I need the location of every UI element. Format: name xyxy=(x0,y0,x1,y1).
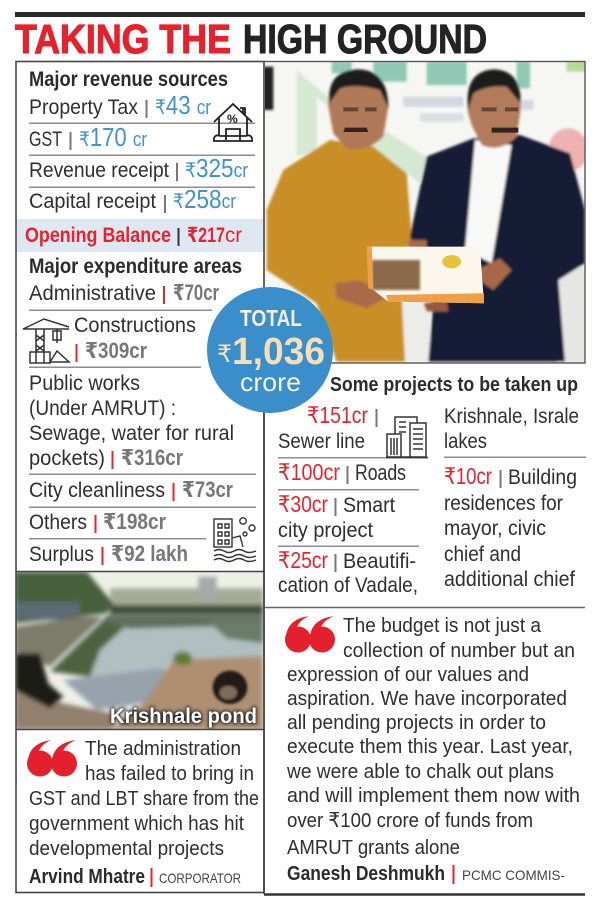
project: residences: ₹10cr xyxy=(444,463,492,489)
row: capital receipt xyxy=(29,184,236,214)
project: beautification: Krishnale, Israle xyxy=(444,405,579,428)
title: TAKING THE xyxy=(15,16,231,62)
row: property tax: Property Tax xyxy=(29,96,138,119)
title: HIGH GROUND xyxy=(243,16,487,62)
project: residences: Building xyxy=(508,466,577,489)
row: GST xyxy=(29,122,147,152)
attribution: Arvind Mhatre xyxy=(29,865,241,888)
project: sewer line xyxy=(278,402,378,453)
row: public works xyxy=(29,372,234,470)
attribution: Ganesh Deshmukh: PCMC COMMIS- xyxy=(462,867,565,883)
quote: corporator: The administration xyxy=(85,737,241,760)
photo: Krishnale pond xyxy=(15,572,263,730)
heading: major revenue sources: Major revenue sources xyxy=(29,68,228,91)
row: others: ₹198cr xyxy=(103,509,166,534)
row: public works: ₹316cr xyxy=(121,445,183,470)
project: smart city: city project xyxy=(278,519,373,542)
quote: PCMC commissioner: and will implement them now with xyxy=(287,784,580,807)
row: surplus xyxy=(29,541,188,566)
attribution: Arvind Mhatre: Arvind Mhatre xyxy=(29,865,145,888)
project: beautification: cation of Vadale, xyxy=(278,574,418,597)
row: GST: ₹170 cr xyxy=(79,122,147,152)
total badge: ₹ xyxy=(217,341,232,368)
quote: PCMC commissioner: execute them this year. Last year, xyxy=(287,735,573,758)
quote: PCMC commissioner xyxy=(285,614,580,885)
project: beautification: Beautifi- xyxy=(343,550,416,573)
row: capital receipt: ₹258cr xyxy=(173,184,236,214)
row: revenue receipt: ₹325cr xyxy=(185,153,248,183)
icon: house with percent: % xyxy=(227,112,238,126)
row: public works: Sewage, water for rural xyxy=(29,422,234,445)
row: city cleanliness: City cleanliness xyxy=(29,479,165,502)
quote: corporator: GST and LBT share from the xyxy=(29,787,259,810)
project: beautification: lakes xyxy=(444,430,487,453)
project: residences: mayor, civic xyxy=(444,517,546,540)
row: revenue receipt: Revenue receipt xyxy=(29,159,169,182)
row: city cleanliness xyxy=(29,477,233,502)
icon: red quote mark xyxy=(285,616,335,652)
icon: cranes xyxy=(23,319,69,363)
quote: corporator: has failed to bring in xyxy=(85,762,254,785)
quote: PCMC commissioner: The budget is not just a xyxy=(343,614,542,637)
row: surplus: ₹92 lakh xyxy=(111,541,188,566)
title xyxy=(15,16,487,62)
project: beautification xyxy=(278,405,579,597)
row: opening balance xyxy=(17,219,263,252)
row: GST: GST xyxy=(29,128,62,151)
project: residences: additional chief xyxy=(444,568,575,591)
row: property tax xyxy=(29,90,211,120)
row: public works: Public works xyxy=(29,372,140,395)
row: public works: pockets) xyxy=(29,447,105,470)
project: roads: ₹100cr xyxy=(278,459,340,485)
quote: PCMC commissioner: collection of number but an xyxy=(343,639,575,662)
quote: corporator: developmental projects xyxy=(29,837,224,860)
panel: projects to be taken up xyxy=(278,374,586,597)
icon: buildings xyxy=(386,417,428,458)
project: sewer line: Sewer line xyxy=(278,430,365,453)
icon: factory discharging into water xyxy=(214,518,256,562)
total badge: TOTAL xyxy=(240,305,302,331)
row: constructions: Constructions xyxy=(74,314,196,337)
caption: Krishnale pond: Krishnale pond xyxy=(110,705,257,728)
project: beautification: ₹25cr xyxy=(278,547,328,573)
caption: Krishnale pond: Krishnale pond xyxy=(110,705,257,728)
attribution: Arvind Mhatre: CORPORATOR xyxy=(159,870,241,886)
row: administrative: Administrative xyxy=(29,282,156,305)
row: opening balance: ₹217 xyxy=(187,224,225,247)
project: sewer line: ₹151cr xyxy=(307,402,368,428)
project: residences: residences for xyxy=(444,492,563,515)
attribution: Ganesh Deshmukh: Ganesh Deshmukh xyxy=(287,862,445,885)
project: roads xyxy=(278,459,406,485)
project: residences xyxy=(444,463,577,591)
row: opening balance: Opening Balance xyxy=(25,224,171,247)
total badge: 1,036 xyxy=(232,331,325,373)
total badge: crore xyxy=(240,367,301,397)
panel: major expenditure areas xyxy=(29,255,256,566)
panel: major revenue sources xyxy=(17,68,263,252)
project: smart city xyxy=(278,491,395,542)
row: opening balance: cr xyxy=(225,224,242,247)
row: constructions: ₹309cr xyxy=(85,338,147,363)
icon: red quote mark xyxy=(27,740,77,776)
heading: major expenditure areas: Major expenditure areas xyxy=(29,255,242,278)
total badge xyxy=(207,287,333,413)
row: capital receipt: Capital receipt xyxy=(29,190,156,213)
row: property tax: ₹43 cr xyxy=(155,90,211,120)
row: city cleanliness: ₹73cr xyxy=(182,477,233,502)
row: constructions xyxy=(74,314,196,363)
project: residences: chief and xyxy=(444,543,521,566)
photo: officials holding budget book xyxy=(260,62,588,363)
quote: PCMC commissioner: all pending projects in order to xyxy=(287,711,546,734)
icon: house with percent xyxy=(214,104,252,141)
row: others xyxy=(29,509,166,534)
row: others: Others xyxy=(29,511,87,534)
project: smart city: ₹30cr xyxy=(278,491,328,517)
quote: PCMC commissioner: over ₹100 crore of funds from xyxy=(287,809,533,832)
project: roads: Roads xyxy=(355,460,406,485)
row: revenue receipt xyxy=(29,153,248,183)
project: smart city: Smart xyxy=(343,494,395,517)
row: administrative xyxy=(29,280,219,305)
attribution: Ganesh Deshmukh xyxy=(287,862,565,885)
row: administrative: ₹70cr xyxy=(173,280,219,305)
quote: PCMC commissioner: AMRUT grants alone xyxy=(287,836,460,859)
quote: corporator xyxy=(27,737,259,888)
row: surplus: Surplus xyxy=(29,543,94,566)
quote: PCMC commissioner: we were able to chalk out plans xyxy=(286,760,554,783)
quote: corporator: government which has hit xyxy=(29,812,244,835)
row: public works: (Under AMRUT) : xyxy=(29,397,176,420)
quote: PCMC commissioner: aspiration. We have incorporated xyxy=(287,687,567,710)
quote: PCMC commissioner: expression of our values and xyxy=(287,663,529,686)
